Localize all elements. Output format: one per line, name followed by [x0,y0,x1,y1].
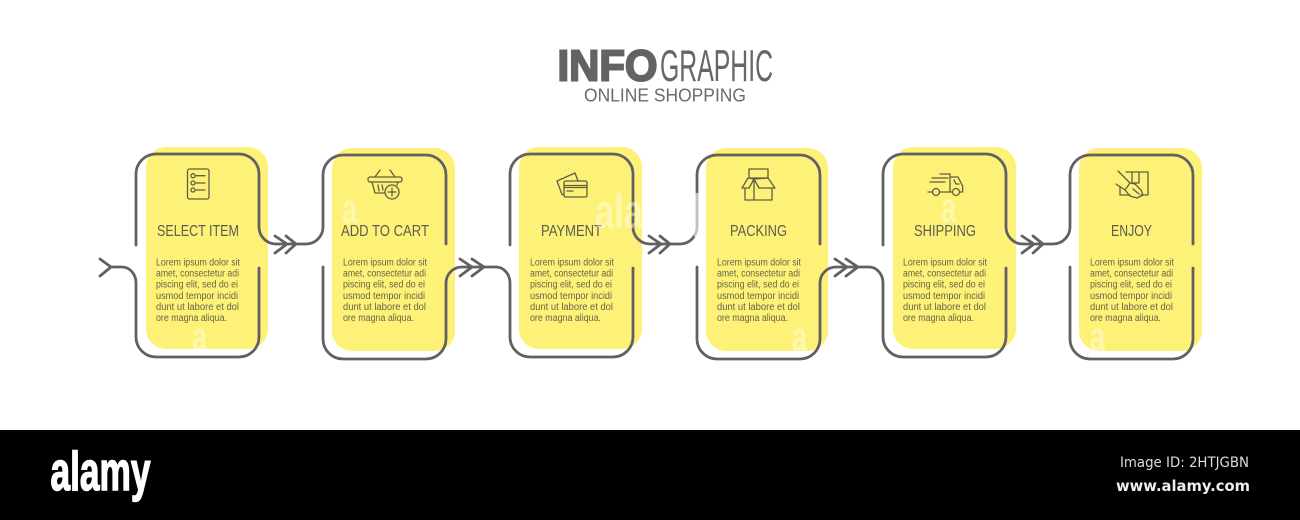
watermark marks: a [941,184,956,231]
text block 4: amet, consectetur adi [717,269,800,280]
heading: enjoy: ENJOY [1111,223,1152,240]
text block 6: piscing elit, sed do ei [1090,280,1172,291]
watermark marks: a [342,185,357,232]
yellow card 4 [706,148,828,351]
text block 1 [156,258,240,324]
text block 1: amet, consectetur adi [156,269,239,280]
text block 5: ore magna aliqua. [903,313,974,324]
text block 4 [717,258,801,324]
text block 1: ore magna aliqua. [156,313,227,324]
icon: credit cards [557,173,587,197]
text block 1: piscing elit, sed do ei [156,280,238,291]
text block 6: dunt ut labore et dol [1090,302,1173,313]
icon: checklist [188,169,209,199]
text block 1: Lorem ipsum dolor sit [156,258,240,268]
yellow card 2 [332,148,455,351]
text block 3 [530,258,614,324]
title: GRAPHIC [660,42,773,91]
text block 2: Lorem ipsum dolor sit [343,258,427,268]
watermark marks: ala [595,186,643,239]
text block 5 [903,258,987,324]
heading: select item: SELECT ITEM [157,223,239,240]
watermark marks [192,184,1105,360]
watermark marks: a [1090,313,1105,360]
heading: payment: PAYMENT [541,223,602,240]
subtitle: ONLINE SHOPPING [584,84,746,106]
arrow: step 4 to step 5 [697,259,1006,359]
text block 3: amet, consectetur adi [530,269,613,280]
title: INFO [558,42,658,90]
yellow card 5 [893,147,1016,349]
text block 5: dunt ut labore et dol [903,302,986,313]
outline: step 6 lower [1070,267,1193,359]
website: www.alamy.com [1116,477,1250,495]
text block 2: usmod tempor incidi [343,291,425,302]
arrow: step 1 to step 2 [136,154,446,253]
text block 4: dunt ut labore et dol [717,302,800,313]
yellow card 6 [1079,148,1202,351]
text block 6: ore magna aliqua. [1090,313,1161,324]
text block 6: usmod tempor incidi [1090,291,1172,302]
text block 4: piscing elit, sed do ei [717,280,799,291]
text block 4: ore magna aliqua. [717,313,788,324]
panel: payment [519,147,642,349]
watermark marks: a [792,313,807,360]
panel: add to cart [332,148,455,351]
panel: select item [146,147,268,349]
text block 1: usmod tempor incidi [156,291,238,302]
text block 3: dunt ut labore et dol [530,302,613,313]
heading: shipping: SHIPPING [914,223,976,240]
text block 4: usmod tempor incidi [717,291,799,302]
icon: truck [928,174,963,196]
arrow: step 3 to step 4 [510,154,820,253]
text block 3: Lorem ipsum dolor sit [530,258,614,268]
text block 5: amet, consectetur adi [903,269,986,280]
text block 3: usmod tempor incidi [530,291,612,302]
text block 5: Lorem ipsum dolor sit [903,258,987,268]
text block 2: dunt ut labore et dol [343,302,426,313]
yellow card 1 [146,147,268,349]
text block 3: piscing elit, sed do ei [530,280,612,291]
text block 3: ore magna aliqua. [530,313,601,324]
text block 6: amet, consectetur adi [1090,269,1173,280]
text block 2: amet, consectetur adi [343,269,426,280]
text block 2: piscing elit, sed do ei [343,280,425,291]
panel: enjoy [1079,148,1202,351]
text block 5: usmod tempor incidi [903,291,985,302]
arrow: step 2 to step 3 [323,259,633,359]
text block 6 [1090,258,1174,324]
title [558,42,773,91]
text block 5: piscing elit, sed do ei [903,280,985,291]
panel: packing [706,148,828,351]
icon: basket [368,170,402,199]
arrow: step 5 to step 6 [883,154,1193,253]
watermark marks: a [192,313,207,360]
icon: box [742,169,775,200]
icon: hand with parcel [1116,171,1148,198]
heading: packing: PACKING [730,223,787,240]
text block 1: dunt ut labore et dol [156,302,239,313]
panel: shipping [893,147,1016,349]
heading: add to cart: ADD TO CART [341,223,429,240]
logo: alamy [50,440,151,502]
text block 2: ore magna aliqua. [343,313,414,324]
connector outlines and arrows [100,154,1193,359]
arrow: entry into step 1 [100,259,259,357]
text block 4: Lorem ipsum dolor sit [717,258,801,268]
text block 6: Lorem ipsum dolor sit [1090,258,1174,268]
image id: Image ID: 2HTJGBN [1120,455,1249,471]
text block 2 [343,258,427,324]
footer band [0,430,1300,520]
yellow card 3 [519,147,642,349]
